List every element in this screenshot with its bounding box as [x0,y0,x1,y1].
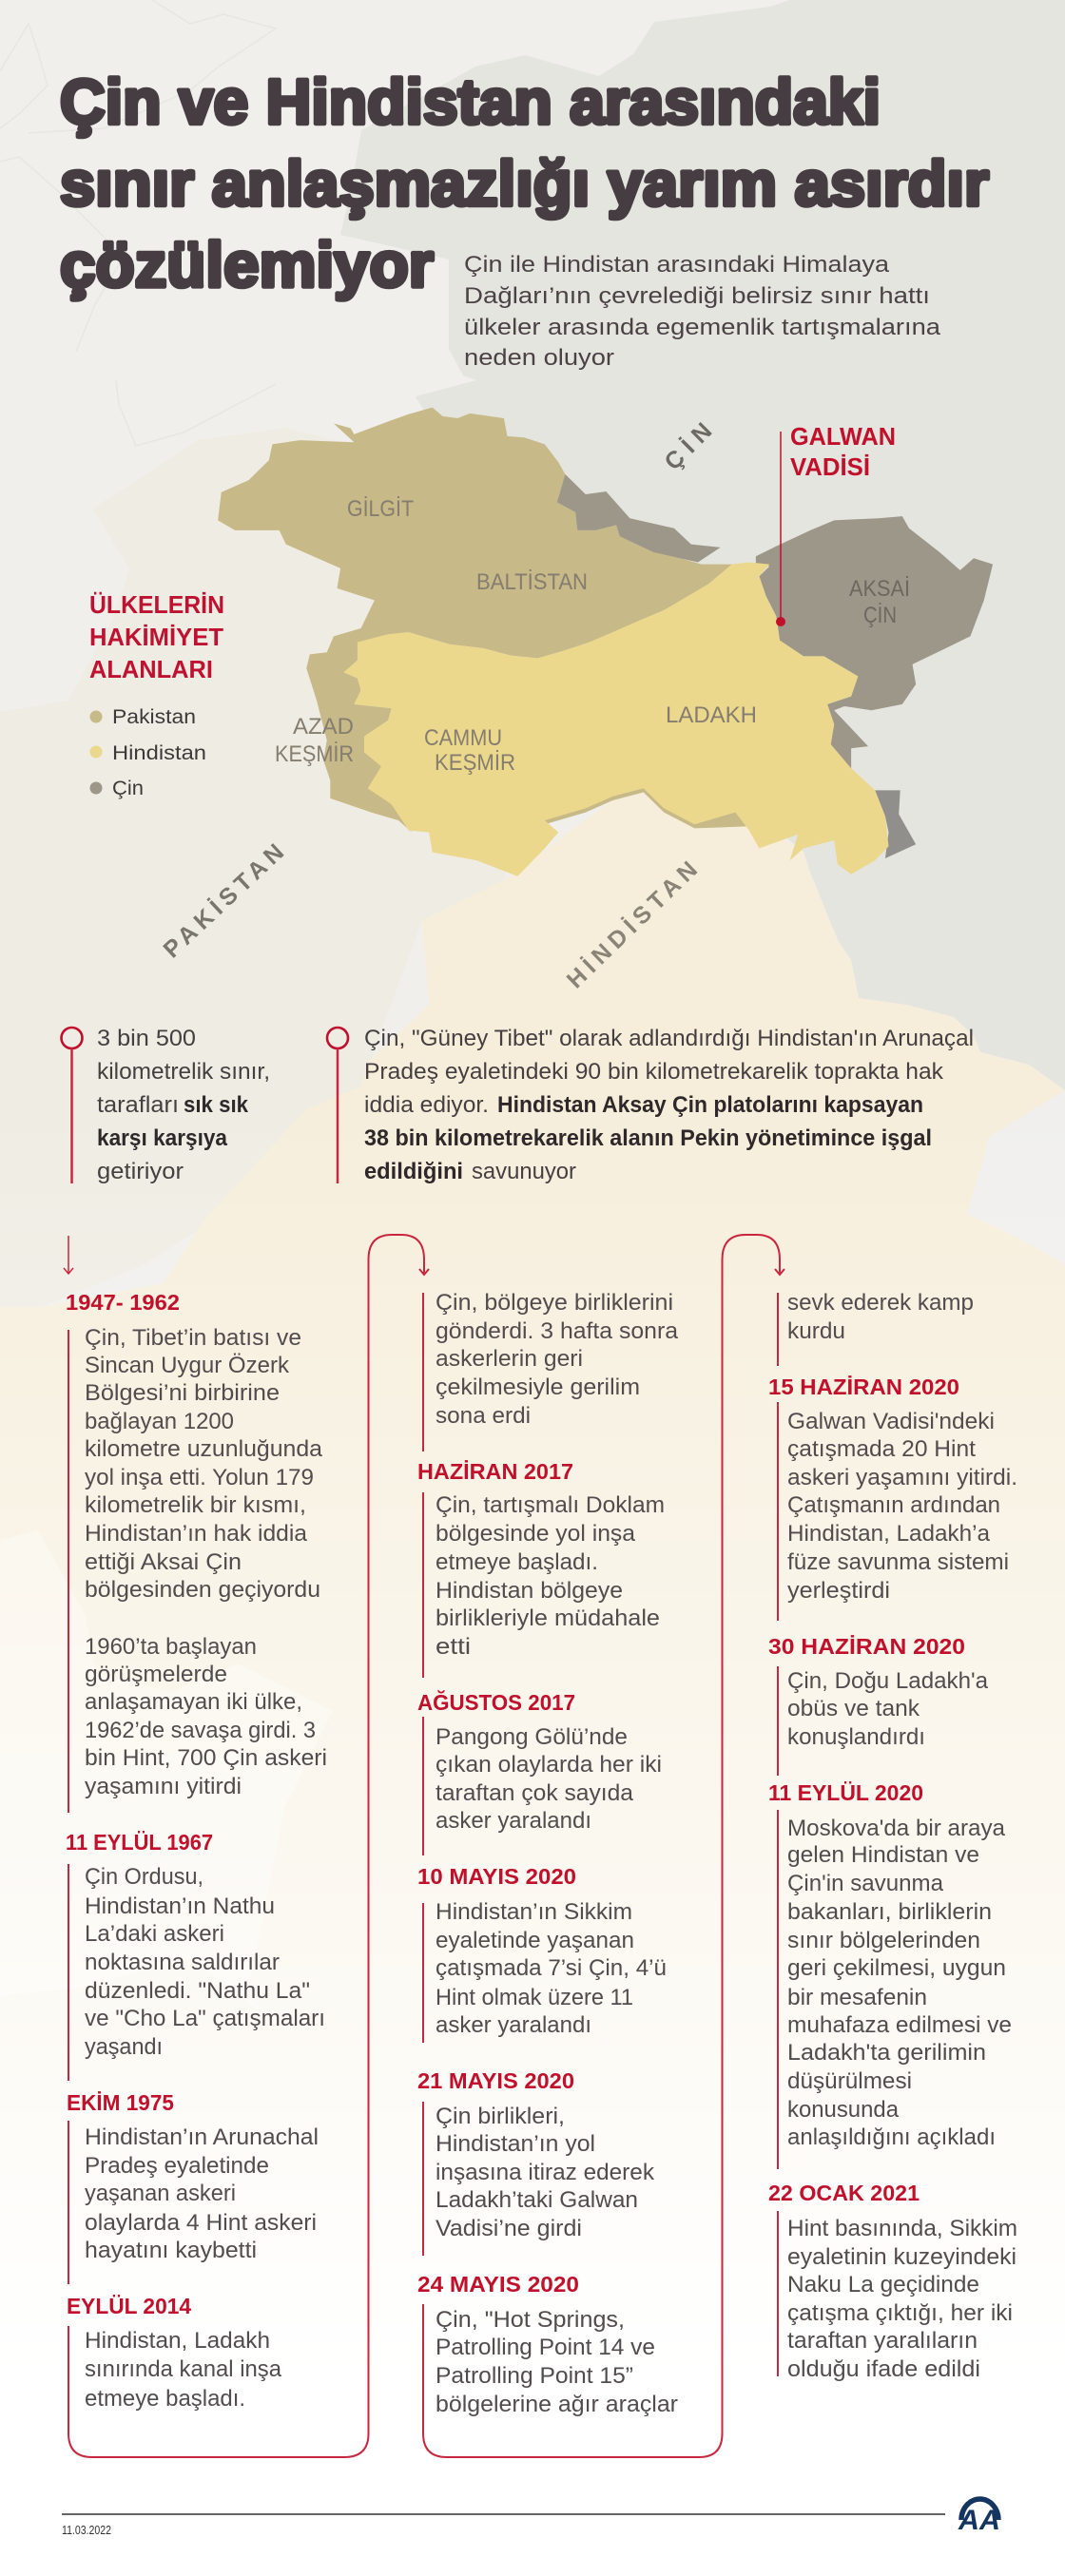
event: 11 Eylül 2020: gelen Hindistan ve [787,1842,979,1868]
event: 1947-1962: 1947- 1962 [66,1290,180,1315]
timeline column 2 [417,1290,679,2417]
event: Haziran 2017: Çin, tartışmalı Doklam [436,1492,665,1518]
info block: border length: tarafları [97,1092,179,1118]
footer [62,2499,1000,2537]
event: Ekim 1975: hayatını kaybetti [85,2238,257,2263]
region labels: ÇİN [863,603,897,628]
legend: ALANLARI [89,655,213,683]
event: 21 Mayıs 2020 [417,2068,655,2256]
event: 1947-1962: anlaşamayan iki ülke, [85,1689,302,1715]
event: 22 Ocak 2021: çatışma çıktığı, her iki [787,2300,1013,2326]
event: 1947-1962 [66,1290,327,1813]
info block: Chinese claims: edildiğini [364,1159,463,1184]
event: Ekim 1975: olaylarda 4 Hint askeri [85,2210,317,2236]
event: Ağustos 2017: taraftan çok sayıda [436,1780,634,1806]
event: Ağustos 2017: Pangong Gölü’nde [436,1724,628,1750]
event: 22 Ocak 2021 [768,2181,1017,2382]
event: Haziran 2017: etmeye başladı. [436,1549,598,1575]
event: 1947-1962: Hindistan’ın hak iddia [85,1521,308,1547]
region labels: GİLGİT [347,496,414,522]
event: Ekim 1975 [67,2090,319,2284]
event: 11 Eylül 2020 [768,1780,1012,2169]
subtitle: Çin ile Hindistan arasındaki Himalaya [464,252,890,278]
event: 11 Eylül 2020: konusunda [787,2097,900,2123]
event: Eylül 2014 continued: Çin, bölgeye birliklerini [436,1290,673,1316]
region labels: AKSAİ [849,576,910,602]
event: Haziran 2017: HAZİRAN 2017 [417,1459,573,1484]
event: Haziran 2017: bölgesinde yol inşa [436,1521,636,1547]
region labels: CAMMU [424,725,502,751]
event: Eylül 2014 [67,2294,282,2412]
arrow: start of timeline [64,1236,73,1274]
region labels: KEŞMİR [435,750,515,776]
event: 10 Mayıs 2020: Hindistan’ın Sikkim [436,1899,632,1925]
event: Eylül 2014 continued [423,1290,679,1451]
event: Ağustos 2017: AĞUSTOS 2017 [417,1689,575,1715]
event: 11 Eylül 2020: geri çekilmesi, uygun [787,1955,1006,1981]
event: 1947-1962: Çin, Tibet’in batısı ve [85,1325,301,1351]
subtitle: neden oluyor [464,345,614,371]
event: Eylül 2014: etmeye başladı. [85,2386,245,2412]
country labels: ÇİN [659,417,717,475]
timeline column 3 [768,1290,1017,2382]
event: 1947-1962: 1960’ta başlayan [85,1634,257,1660]
callout: Galwan Valley: GALWAN [790,422,896,451]
event: 11 Eylül 1967: La’daki askeri [85,1921,224,1947]
event: 1947-1962: bin Hint, 700 Çin askeri [85,1745,327,1771]
region: India [344,563,889,876]
info block: Chinese claims: 38 bin kilometrekarelik alanın Pekin yönetimince işgal [364,1125,932,1151]
event: Haziran 2017: etti [436,1634,471,1660]
event: 10 Mayıs 2020: eyaletinde yaşanan [436,1928,634,1953]
region labels: LADAKH [666,702,757,728]
event: Eylül 2014 continued: sona erdi [436,1403,531,1429]
event: 30 Haziran 2020: Çin, Doğu Ladakh'a [787,1668,989,1694]
event: Eylül 2014 continued: gönderdi. 3 hafta sonra [436,1318,679,1344]
event: Eylül 2014 continued: askerlerin geri [436,1346,583,1372]
event: 11 Eylül 2020: Ladakh'ta gerilimin [787,2040,986,2066]
legend item: Çin [89,778,144,799]
event: 15 Haziran 2020: Galwan Vadisi'ndeki [787,1409,995,1434]
event: 15 Haziran 2020: füze savunma sistemi [787,1549,1009,1575]
region labels: KEŞMİR [275,741,354,767]
event: 1947-1962: bölgesinden geçiyordu [85,1577,320,1603]
map: Kashmir control areas [158,408,993,993]
event: Ağustos 2017: çıkan olaylarda her iki [436,1752,662,1778]
info block: border length: sık sık [184,1092,249,1118]
event: Eylül 2014: sınırında kanal inşa [85,2356,282,2382]
event: 1947-1962: kilometre uzunluğunda [85,1436,323,1462]
event: 10 Mayıs 2020: çatışmada 7’si Çin, 4’ü [436,1955,667,1981]
event: 21 Mayıs 2020: inşasına itiraz ederek [436,2160,655,2185]
event: 24 Mayıs 2020 [417,2272,678,2417]
info block: border length: 3 bin 500 [97,1026,196,1051]
event: 1947-1962: yaşamını yitirdi [85,1774,242,1799]
event: 11 Eylül 1967: Hindistan’ın Nathu [85,1894,275,1919]
event: Ekim 1975: Pradeş eyaletinde [85,2153,269,2179]
event: 22 Ocak 2021: olduğu ifade edildi [787,2356,980,2382]
title: sınır anlaşmazlığı yarım asırdır [60,148,989,220]
callout: Galwan Valley: VADİSİ [790,452,870,481]
legend item: Çin: Çin [112,778,144,799]
event: 15 Haziran 2020 [768,1375,1017,1621]
event: 11 Eylül 2020: sınır bölgelerinden [787,1928,980,1953]
event: Haziran 2017 [417,1459,665,1678]
event: 10 Mayıs 2020: Hint olmak üzere 11 [436,1985,633,2010]
info block: border length: getiriyor [97,1159,184,1184]
info block: Chinese claims: savunuyor [472,1159,576,1184]
event: 15 Haziran 2020: Hindistan, Ladakh’a [787,1521,991,1547]
event: 24 Mayıs 2020: bölgelerine ağır araçlar [436,2392,678,2417]
event: 21 Mayıs 2020: 21 MAYIS 2020 [417,2068,574,2093]
event: 1947-1962: yol inşa etti. Yolun 179 [85,1465,314,1490]
subtitle [464,252,941,371]
region: Pakistan southern edge [545,783,749,828]
event: 11 Eylül 2020: muhafaza edilmesi ve [787,2012,1012,2038]
event: Haziran 2017: Hindistan bölgeye [436,1578,623,1604]
event: 24 Mayıs 2020 continued: kurdu [787,1318,845,1344]
event: 1947-1962: 1962’de savaşa girdi. 3 [85,1718,316,1743]
country labels: HİNDİSTAN [562,856,703,993]
legend [89,590,224,799]
event: 22 Ocak 2021: Naku La geçidinde [787,2272,979,2297]
event: 22 Ocak 2021: eyaletinin kuzeyindeki [787,2244,1017,2270]
event: Eylül 2014: Hindistan, Ladakh [85,2328,270,2354]
event: 1947-1962: kilometrelik bir kısmı, [85,1492,306,1518]
event: 11 Eylül 1967: yaşandı [85,2034,163,2060]
timeline column 1 [66,1290,327,2412]
event: 24 Mayıs 2020: Çin, "Hot Springs, [436,2307,625,2333]
icon: AA logo: AA [958,2505,1000,2536]
event: 11 Eylül 2020: anlaşıldığını açıkladı [787,2124,996,2150]
event: 1947-1962: bağlayan 1200 [85,1409,234,1434]
event: 11 Eylül 2020: 11 EYLÜL 2020 [768,1780,923,1805]
legend: HAKİMİYET [89,623,223,651]
event: Ekim 1975: yaşanan askeri [85,2181,236,2206]
region labels: AZAD [293,714,354,740]
event: 24 Mayıs 2020: Patrolling Point 15” [436,2363,633,2389]
timeline connector: column 1 to 2 [68,1235,429,2457]
info block: Chinese claims: Hindistan Aksay Çin platolarını kapsayan [497,1092,923,1118]
event: 11 Eylül 1967: Çin Ordusu, [85,1864,203,1890]
event: Eylül 2014 continued: çekilmesiyle gerilim [436,1375,640,1400]
title: çözülemiyor [60,230,434,300]
event: 15 Haziran 2020: yerleştirdi [787,1578,890,1604]
event: 10 Mayıs 2020: 10 MAYIS 2020 [417,1864,576,1889]
region: China [557,474,993,858]
event: 22 Ocak 2021: taraftan yaralıların [787,2328,978,2354]
event: Eylül 2014: EYLÜL 2014 [67,2294,191,2318]
event: 30 Haziran 2020: obüs ve tank [787,1696,920,1721]
event: 21 Mayıs 2020: Çin birlikleri, [436,2104,565,2129]
event: 11 Eylül 1967 [66,1830,325,2081]
event: 1947-1962: Bölgesi’ni birbirine [85,1380,280,1406]
event: 24 Mayıs 2020: 24 MAYIS 2020 [417,2272,579,2297]
info block: Chinese claims [327,1026,974,1184]
event: 11 Eylül 1967: ve "Cho La" çatışmaları [85,2006,325,2031]
event: 22 Ocak 2021: Hint basınında, Sikkim [787,2216,1017,2241]
legend: ÜLKELERİN [89,590,224,619]
subtitle: ülkeler arasında egemenlik tartışmalarına [464,315,941,340]
info block: border length: karşı karşıya [97,1125,228,1151]
event: 24 Mayıs 2020: Patrolling Point 14 ve [436,2335,655,2360]
event: 10 Mayıs 2020: asker yaralandı [436,2012,591,2038]
event: 1947-1962: görüşmelerde [85,1662,227,1687]
legend item: Hindistan: Hindistan [112,742,206,764]
event: 30 Haziran 2020: 30 HAZİRAN 2020 [768,1634,965,1659]
event: 22 Ocak 2021: 22 OCAK 2021 [768,2181,920,2205]
info block: border length [61,1026,270,1184]
title [60,67,989,300]
region labels: BALTİSTAN [476,569,588,595]
subtitle: Dağları’nın çevrelediği belirsiz sınır hattı [464,283,930,309]
event: 11 Eylül 2020: bir mesafenin [787,1985,927,2010]
event: 1947-1962: Sincan Uygur Özerk [85,1353,290,1378]
callout: Galwan Valley [776,422,896,626]
info block: Chinese claims: Pradeş eyaletindeki 90 bin kilometrekarelik toprakta hak [364,1059,944,1085]
event: 15 Haziran 2020: Çatışmanın ardından [787,1492,1000,1518]
event: 11 Eylül 1967: noktasına saldırılar [85,1950,280,1975]
event: 21 Mayıs 2020: Hindistan’ın yol [436,2131,595,2157]
event: 11 Eylül 2020: Çin'in savunma [787,1871,944,1896]
event: Ekim 1975: Hindistan’ın Arunachal [85,2124,319,2150]
event: 1947-1962: ettiği Aksai Çin [85,1549,242,1575]
region labels [275,496,910,776]
event: 11 Eylül 2020: bakanları, birliklerin [787,1899,992,1925]
info block: border length: kilometrelik sınır, [97,1059,270,1085]
country labels [158,417,717,993]
info block: Chinese claims: Çin, "Güney Tibet" olarak adlandırdığı Hindistan'ın Arunaçal [364,1026,974,1051]
event: 11 Eylül 2020: Moskova'da bir araya [787,1816,1006,1841]
timeline connector: column 2 to 3 [423,1235,784,2457]
event: 24 Mayıs 2020 continued: sevk ederek kamp [787,1290,974,1316]
event: 11 Eylül 1967: 11 EYLÜL 1967 [66,1830,213,1855]
event: Haziran 2017: birlikleriyle müdahale [436,1605,660,1631]
event: Ağustos 2017 [417,1689,662,1855]
date: 11.03.2022 [62,2523,111,2537]
country labels: PAKİSTAN [158,838,289,963]
event: Ağustos 2017: asker yaralandı [436,1808,591,1834]
event: 11 Eylül 2020: düşürülmesi [787,2068,912,2094]
event: 24 Mayıs 2020 continued [778,1290,974,1366]
event: 21 Mayıs 2020: Ladakh’taki Galwan [436,2187,638,2213]
legend item: Pakistan: Pakistan [112,706,196,728]
info block: Chinese claims: iddia ediyor. [364,1092,489,1118]
event: 10 Mayıs 2020 [417,1864,667,2043]
event: 15 Haziran 2020: askeri yaşamını yitirdi. [787,1465,1017,1490]
event: 11 Eylül 1967: düzenledi. "Nathu La" [85,1978,310,2004]
event: 21 Mayıs 2020: Vadisi’ne girdi [436,2216,582,2241]
event: Ekim 1975: EKİM 1975 [67,2090,174,2115]
event: 30 Haziran 2020 [768,1634,989,1776]
event: 30 Haziran 2020: konuşlandırdı [787,1724,925,1750]
event: 15 Haziran 2020: çatışmada 20 Hint [787,1436,976,1462]
event: 15 Haziran 2020: 15 HAZİRAN 2020 [768,1375,959,1399]
title: Çin ve Hindistan arasındaki [60,67,881,138]
region: Pakistan [218,408,732,833]
